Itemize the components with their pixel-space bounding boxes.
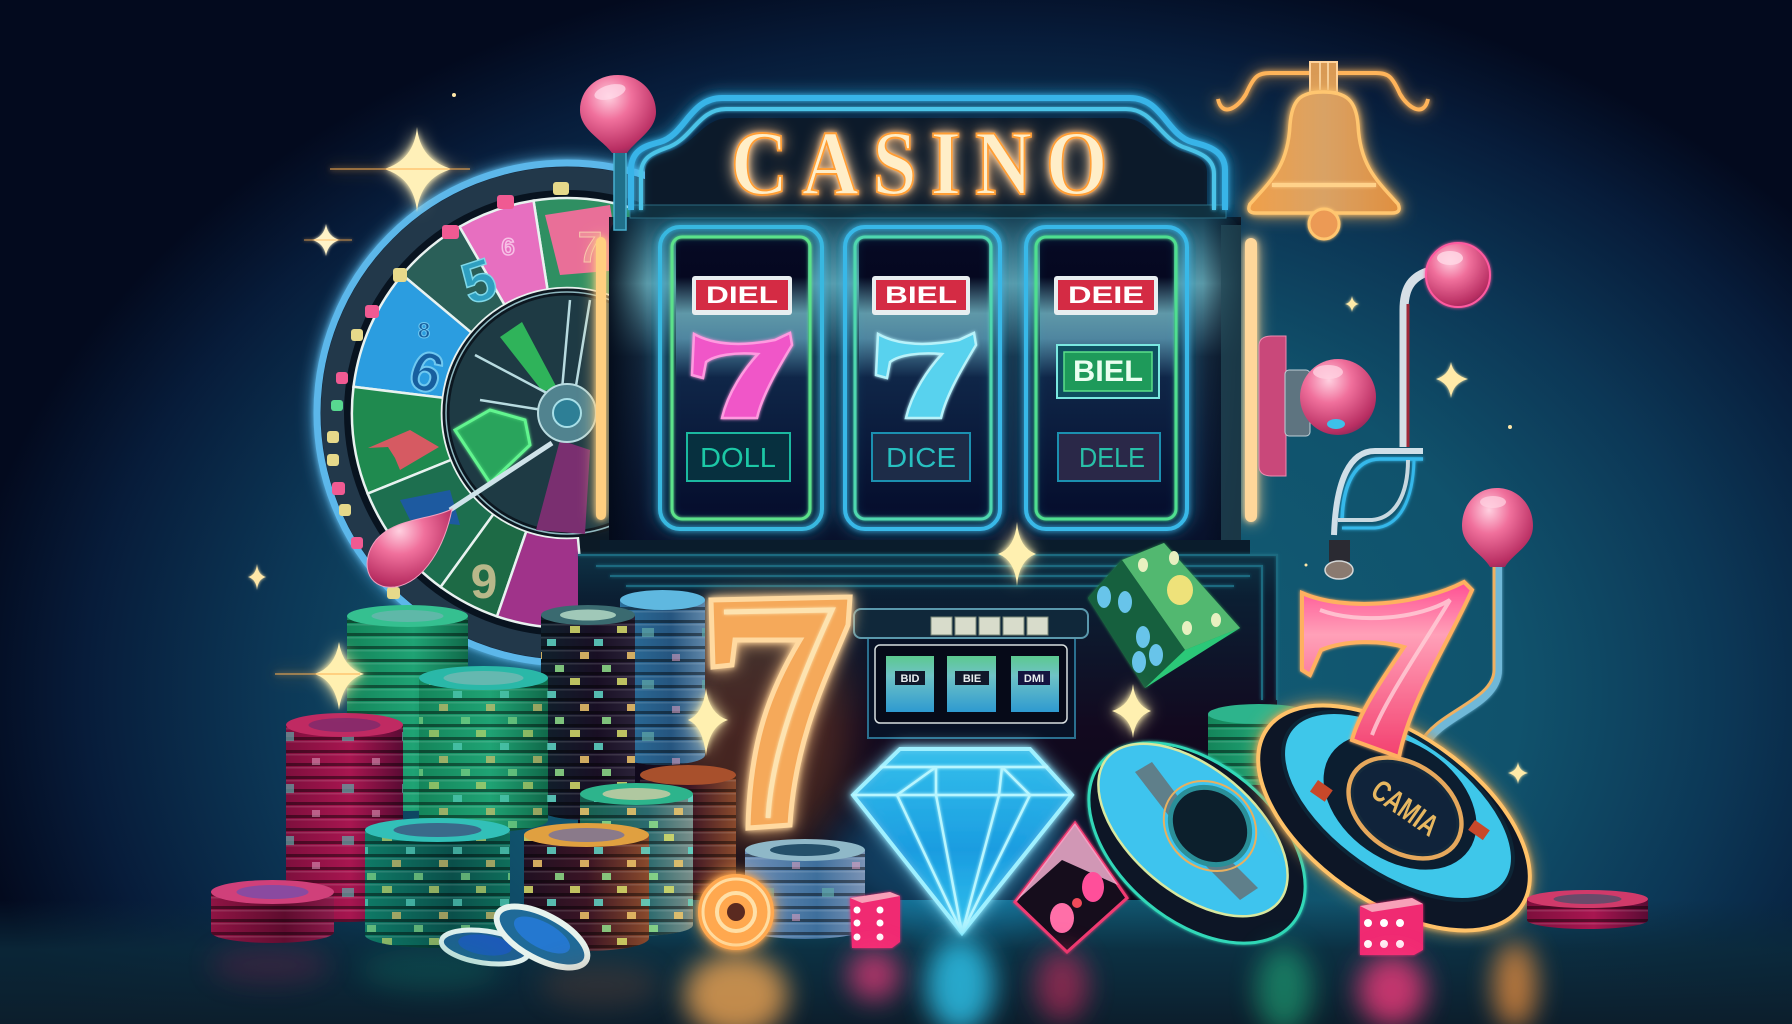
sparkle right [1436,362,1468,398]
chip stack: brown front [524,823,649,951]
chip stack: green behind big chips [1208,704,1310,785]
chip stack: green back [347,605,468,811]
pink dark die [1015,823,1127,952]
wheel red arrow mark [368,430,439,470]
sparkle tiny right [1345,296,1359,312]
right curved lever [1325,243,1490,579]
mini reel 3: DMI [1024,673,1044,685]
wheel symbols: 9 [471,556,497,609]
big chip label: CAMIA [1365,774,1444,843]
marquee [630,98,1226,218]
reel 1 top label: DIEL [706,282,778,309]
sparkle on machine [998,522,1036,586]
reel 1 pink seven [692,333,792,418]
chip stack: brown back right [640,765,736,895]
marquee panel [645,118,1207,207]
reel 1 bottom label: DOLL [700,442,776,473]
mini panel keys [931,617,1048,635]
chip stack: pink tall [286,713,403,922]
sparkle dots [452,93,1512,566]
bell body [1249,92,1399,213]
chip stack: blue back [620,590,705,765]
mini reel 1 [886,656,934,712]
right side crank knob [1259,336,1376,476]
reel 2 cyan seven [876,333,976,418]
marquee neon frame [631,98,1225,210]
wheel symbols [368,205,620,609]
reel 2 bottom label: DICE [886,442,956,473]
big chip left [1051,703,1343,983]
chip stack: blue right [745,839,865,939]
bell clapper [1309,209,1339,239]
roulette wheel [317,163,817,663]
reel 3 [1026,227,1187,529]
wheel outer markers [327,182,569,599]
mini reel 2 [947,656,996,712]
small pink die right [1360,898,1423,955]
wheel symbols: 6 [501,234,515,261]
loose chip right [488,894,596,980]
mini panel frame [868,638,1075,738]
reel 3 bottom label: DELE [1079,442,1145,473]
marquee title: CASINO [731,113,1121,214]
big chip right [1219,660,1569,976]
lower lever [1421,488,1533,745]
reel 3 top label [1054,276,1158,315]
wheel green gem [455,410,530,483]
bell [1218,62,1428,239]
sparkle by chips [275,642,364,710]
wheel segments [352,198,674,628]
green die [1088,543,1240,688]
sparkles [248,93,1528,784]
mini panel cap [854,609,1088,638]
sparkle lower right [1508,762,1528,784]
reel 1 top label [692,276,792,315]
chip stack: small pink left [211,880,334,943]
slot machine [580,75,1376,550]
sparkle small left [248,564,266,590]
wheel pointer [367,443,552,587]
left lever knob [580,75,656,230]
wheel track ring [334,180,800,646]
cabinet body [609,217,1241,550]
chip stack: green center [580,783,693,936]
mini reel 1: BID [901,673,920,685]
sparkle by seven [688,688,728,756]
mini slot panel [854,609,1088,738]
chip stack: teal front [365,818,510,948]
loose chip left [439,925,531,969]
right neon side bar [1245,238,1257,522]
machine base [578,540,1277,930]
sparkle small upper left [304,224,352,256]
sparkle by die [1112,684,1151,738]
reel 1 [660,227,822,529]
neon ring [703,879,769,945]
pink neon seven [1302,582,1472,757]
chip stack: teal green tall [419,666,548,832]
floor [0,900,1792,1024]
reel 3 green label [1057,345,1159,398]
reel 1 bottom label [687,433,790,481]
left neon side bar [596,237,606,520]
wheel symbols: 7 [578,223,602,272]
wheel symbols: 6 [401,337,452,407]
chip stack: small pink right [1527,890,1648,929]
sparkle large top left [330,127,470,212]
diamond [853,749,1072,933]
reel 2 [845,227,1000,529]
floor reflections [210,937,1537,1024]
wheel neon rim [317,163,817,663]
marquee shelf [630,205,1226,218]
reel 2 bottom label [872,433,970,481]
wheel symbols: 8 [418,318,430,343]
wheel symbols: 5 [454,246,504,317]
reel 3 bottom label [1058,433,1160,481]
mini reel 2: BIE [963,673,981,685]
mini reel 3 [1011,656,1059,712]
reel 2 top label: BIEL [885,282,957,309]
bell hanger [1218,73,1428,109]
reel 3 top label: DEIE [1068,282,1144,309]
chip stack: dark back [541,605,635,820]
reel 3 green label: BIEL [1073,355,1143,388]
small pink die left [850,892,900,948]
large gold neon seven [711,597,850,828]
reel 2 top label [872,276,970,315]
wheel inner ring and hub spokes [446,292,688,534]
